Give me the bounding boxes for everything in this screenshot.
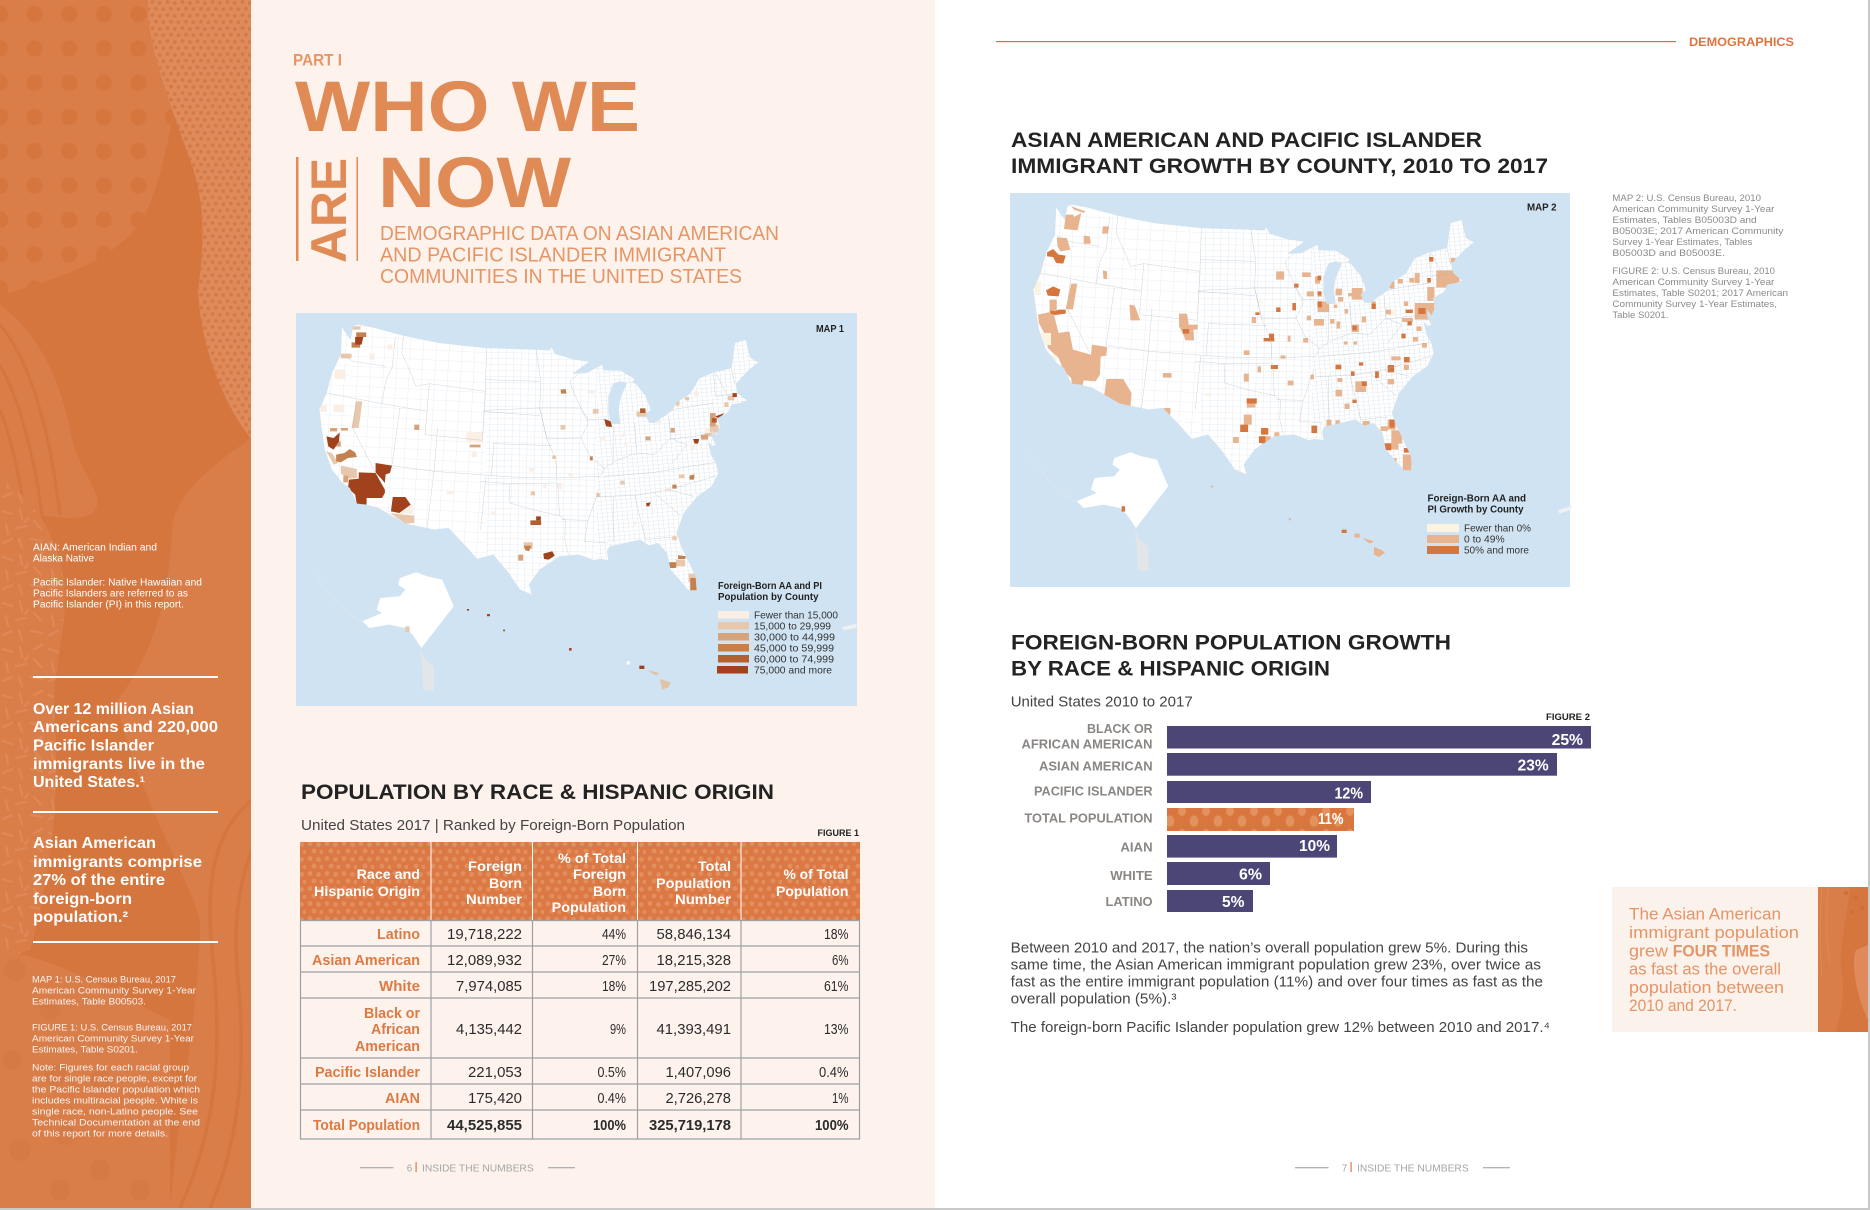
map 2 legend: PI Growth by County (1428, 504, 1524, 516)
subtitle: AND PACIFIC ISLANDER IMMIGRANT (380, 244, 726, 266)
row: Black or African American: American (355, 1039, 420, 1055)
row: Latino: 44% (602, 927, 626, 943)
heading: figure 2: BY RACE & HISPANIC ORIGIN (1011, 658, 1330, 680)
bar: Black or African American 25% (1022, 721, 1591, 752)
source notes: map 2 and figure 2: Community Survey 1-Year Estimates, (1612, 299, 1777, 310)
source notes: map 2 and figure 2: MAP 2: U.S. Census Bureau, 2010 (1612, 193, 1761, 204)
source notes (32, 974, 200, 1140)
row: Asian American (312, 953, 849, 969)
footer: page 7 (1295, 1162, 1510, 1174)
row: AIAN (385, 1091, 849, 1107)
footer: page 7: 7 (1342, 1162, 1347, 1174)
map 1 legend (717, 581, 838, 676)
table header: Born (489, 875, 522, 891)
title: ARE (301, 158, 357, 263)
row: Black or African American: 4,135,442 (456, 1022, 522, 1038)
table header: Foreign (573, 866, 626, 882)
map 2 legend: Fewer than 0% (1464, 522, 1531, 534)
source notes: Estimates, Table S0201. (32, 1044, 138, 1056)
stat: 27 percent (33, 835, 202, 926)
bar: Pacific Islander 12%: PACIFIC ISLANDER (1034, 784, 1153, 798)
table header: Hispanic Origin (314, 883, 420, 899)
source notes: American Community Survey 1-Year (32, 986, 196, 996)
glossary note: Pacific Islander: Native Hawaiian and (33, 578, 202, 588)
row: AIAN: 2,726,278 (666, 1091, 731, 1107)
row: Total Population: 44,525,855 (447, 1118, 522, 1134)
row: Pacific Islander: 1,407,096 (666, 1065, 731, 1081)
map 1 legend: Foreign-Born AA and PI (718, 581, 822, 592)
row: Latino (377, 927, 849, 943)
row: Asian American: 18,215,328 (656, 953, 731, 969)
stat: 27 percent: foreign-born (33, 891, 132, 908)
page background: left page (0, 0, 935, 1208)
callout: four times: as fast as the overall (1629, 960, 1781, 979)
row: AIAN: 175,420 (468, 1091, 522, 1107)
stat: 12 million: United States.¹ (33, 774, 145, 791)
row: Black or African American: 13% (824, 1022, 849, 1038)
table header: Population (776, 883, 848, 899)
callout: four times: population between (1629, 978, 1784, 997)
row: AIAN: AIAN (385, 1091, 420, 1107)
source notes: map 2 and figure 2: American Community Survey 1-Year (1612, 204, 1774, 215)
title: NOW (378, 144, 571, 223)
map 1 legend: Population by County (718, 592, 819, 603)
table header: Foreign (468, 858, 522, 874)
map 1 legend: 45,000 to 59,999 (754, 642, 834, 654)
part label: PART I (293, 50, 342, 70)
stat: 12 million (33, 701, 218, 791)
stat: 27 percent: population.² (33, 909, 128, 926)
map 1 legend: 75,000 and more (754, 664, 832, 676)
divider (33, 676, 218, 678)
subtitle: COMMUNITIES IN THE UNITED STATES (380, 265, 742, 288)
bar: Latino 5%: LATINO (1106, 894, 1153, 909)
table header: Population (656, 875, 731, 891)
table header: Race and (357, 866, 420, 882)
source notes: map 2 and figure 2: B05003D and B05003E. (1612, 248, 1725, 259)
map 1 legend: 30,000 to 44,999 (754, 632, 835, 644)
body text: The foreign-born Pacific Islander population grew 12% between 2010 and 2017.⁴ (1011, 1020, 1550, 1036)
heading: population table: POPULATION BY RACE & HISPANIC ORIGIN (301, 781, 774, 804)
bar: Total Population 11%: 11% (1318, 811, 1344, 828)
row: Pacific Islander: 0.4% (819, 1065, 849, 1081)
source notes: of this report for more details. (32, 1128, 168, 1140)
panel: orange sidebar (0, 0, 252, 1208)
stat: 27 percent: Asian American (33, 835, 156, 852)
row: Black or African American: 41,393,491 (656, 1022, 731, 1038)
body text (1011, 940, 1550, 1036)
row: Total Population (313, 1118, 849, 1134)
row: Black or African American: African (371, 1022, 420, 1038)
callout: four times: grew (1629, 941, 1669, 960)
source notes: map 2 and figure 2: B05003E; 2017 American Community (1612, 226, 1784, 237)
map 1 label: MAP 1 (816, 323, 844, 335)
bar: Black or African American 25%: AFRICAN AMERICAN (1022, 736, 1152, 752)
figure 1 label: FIGURE 1 (818, 828, 860, 839)
row: Black or African American (355, 1006, 849, 1055)
figure 2 subtitle: United States 2010 to 2017 (1011, 694, 1193, 710)
row: Asian American: 12,089,932 (447, 953, 522, 969)
source notes: the Pacific Islander population which (32, 1084, 200, 1096)
row: White: 197,285,202 (649, 979, 731, 995)
title (295, 68, 640, 263)
row: Total Population: 100% (815, 1118, 849, 1134)
row: White: 7,974,085 (456, 979, 522, 995)
glossary note: Pacific Islanders are referred to as (33, 588, 188, 600)
source notes: MAP 1: U.S. Census Bureau, 2017 (32, 974, 176, 986)
footer: page 7: INSIDE THE NUMBERS (1357, 1162, 1469, 1174)
running header: demographics: DEMOGRAPHICS (1689, 35, 1794, 49)
source notes: Note: Figures for each racial group (32, 1062, 189, 1074)
stat: 12 million: Pacific Islander (33, 738, 154, 754)
subtitle: DEMOGRAPHIC DATA ON ASIAN AMERICAN (380, 222, 779, 245)
bar: White 6%: WHITE (1110, 868, 1153, 883)
footer: page 6: 6 (407, 1162, 412, 1174)
table header: Total (698, 858, 731, 874)
table header: Number (675, 891, 732, 907)
stat: 27 percent: immigrants comprise (33, 854, 202, 871)
row: Latino: 58,846,134 (656, 927, 731, 943)
bar: Total Population 11% (1024, 808, 1354, 831)
stat: 12 million: Over 12 million Asian (33, 701, 194, 718)
figure 2 label: FIGURE 2 (1546, 712, 1590, 723)
map 2 label: MAP 2 (1527, 202, 1557, 214)
source notes: map 2 and figure 2 (1612, 193, 1788, 321)
divider (33, 811, 218, 813)
bar: Asian American 23% (1039, 753, 1557, 776)
footer: page 6: INSIDE THE NUMBERS (422, 1162, 534, 1174)
heading: map 2: IMMIGRANT GROWTH BY COUNTY, 2010 TO 2017 (1011, 155, 1548, 178)
bar chart: population growth (1022, 721, 1591, 912)
table subtitle: United States 2017 | Ranked by Foreign-Born Population (301, 817, 685, 834)
map 2 legend: 50% and more (1464, 544, 1529, 556)
divider (33, 941, 218, 943)
heading: figure 2: FOREIGN-BORN POPULATION GROWTH (1011, 632, 1451, 654)
map 2: immigrant growth by county (1010, 193, 1572, 587)
footer: page 6 (360, 1162, 575, 1174)
source notes: FIGURE 1: U.S. Census Bureau, 2017 (32, 1022, 192, 1034)
row: Latino: Latino (377, 927, 420, 943)
row: White (379, 979, 849, 995)
map 1 legend: 15,000 to 29,999 (754, 620, 831, 632)
bar: Black or African American 25%: 25% (1552, 732, 1583, 749)
callout: four times: The Asian American (1629, 904, 1781, 924)
row: White: 61% (824, 979, 849, 995)
body text: Between 2010 and 2017, the nation’s overall population grew 5%. During this (1011, 940, 1528, 956)
source notes: map 2 and figure 2: Estimates, Tables B05003D and (1612, 215, 1757, 226)
source notes: single race, non-Latino people. See (32, 1106, 198, 1118)
row: Total Population: 325,719,178 (649, 1118, 731, 1134)
table header: Population (552, 899, 626, 915)
source notes: map 2 and figure 2: Table S0201. (1612, 310, 1668, 321)
bar: AIAN 10% (1120, 835, 1337, 858)
bar: Latino 5%: 5% (1222, 894, 1244, 911)
bar: Latino 5% (1106, 890, 1253, 912)
bar: Pacific Islander 12%: 12% (1334, 786, 1363, 802)
glossary note: AIAN: American Indian and (33, 542, 157, 554)
subtitle (380, 222, 779, 288)
row: AIAN: 1% (832, 1091, 849, 1107)
heading: map 2 (1011, 129, 1548, 178)
source notes: Estimates, Table B00503. (32, 996, 146, 1008)
glossary note: Alaska Native (33, 554, 94, 564)
bar: Total Population 11%: TOTAL POPULATION (1024, 810, 1153, 826)
stat: 12 million: immigrants live in the (33, 756, 205, 773)
row: Asian American: Asian American (312, 953, 420, 969)
row: Asian American: 27% (602, 953, 626, 969)
map 1: foreign-born population by county (296, 313, 857, 706)
row: White: 18% (602, 979, 626, 995)
callout: four times: 2010 and 2017. (1629, 996, 1737, 1015)
row: Latino: 19,718,222 (447, 927, 522, 943)
glossary note (33, 542, 202, 610)
bar: Asian American 23%: 23% (1518, 758, 1549, 774)
row: Black or African American: 9% (610, 1022, 626, 1038)
row: Pacific Islander: 221,053 (468, 1065, 522, 1081)
source notes: includes multiracial people. White is (32, 1096, 198, 1106)
callout: four times: FOUR TIMES (1673, 941, 1770, 960)
source notes: map 2 and figure 2: Survey 1-Year Estimates, Tables (1612, 237, 1753, 248)
row: Asian American: 6% (832, 953, 849, 969)
row: Pacific Islander (315, 1065, 849, 1081)
bar: AIAN 10%: AIAN (1120, 840, 1153, 854)
page background: right page (935, 0, 1868, 1208)
bar: White 6%: 6% (1239, 866, 1262, 884)
row: Latino: 18% (824, 927, 849, 943)
row: Pacific Islander: 0.5% (598, 1065, 626, 1081)
map 2 legend (1427, 494, 1531, 556)
callout: four times: immigrant population (1629, 923, 1799, 942)
map 2 legend: Foreign-Born AA and (1428, 494, 1526, 504)
table header: Born (593, 883, 626, 899)
map 1 legend: Fewer than 15,000 (754, 610, 838, 622)
row: White: White (379, 979, 420, 995)
map 1 legend: 60,000 to 74,999 (754, 654, 834, 666)
source notes: map 2 and figure 2: Estimates, Table S0201; 2017 American (1612, 288, 1788, 299)
body text: same time, the Asian American immigrant population grew 23%, over twice as (1011, 958, 1541, 974)
body text: fast as the entire immigrant population (11%) and over four times as fast as the (1011, 974, 1543, 990)
body text: overall population (5%).³ (1011, 992, 1177, 1008)
table header: Number (466, 891, 523, 907)
glossary note: Pacific Islander (PI) in this report. (33, 600, 184, 610)
stat: 12 million: Americans and 220,000 (33, 719, 218, 736)
bar: White 6% (1110, 862, 1270, 885)
source notes: Technical Documentation at the end (32, 1118, 200, 1128)
row: Pacific Islander: Pacific Islander (315, 1065, 420, 1081)
bar: Black or African American 25%: BLACK OR (1087, 721, 1153, 736)
table header (300, 842, 860, 920)
source notes: American Community Survey 1-Year (32, 1034, 194, 1044)
stat: 27 percent: 27% of the entire (33, 872, 165, 889)
heading: map 2: ASIAN AMERICAN AND PACIFIC ISLANDER (1011, 129, 1482, 152)
row: Total Population: 100% (593, 1118, 626, 1134)
bar: Pacific Islander 12% (1034, 781, 1371, 803)
title: WHO WE (295, 68, 640, 147)
source notes: map 2 and figure 2: FIGURE 2: U.S. Census Bureau, 2010 (1612, 266, 1775, 277)
row: AIAN: 0.4% (598, 1091, 626, 1107)
table header: % of Total (784, 866, 848, 882)
table header: % of Total (558, 850, 626, 866)
row: Total Population: Total Population (313, 1118, 420, 1134)
source notes: are for single race people, except for (32, 1074, 197, 1084)
heading: figure 2 (1011, 632, 1451, 680)
row: Black or African American: Black or (364, 1006, 420, 1022)
callout: four times (1612, 887, 1868, 1032)
callout decorative strip (1818, 887, 1868, 1032)
source notes: map 2 and figure 2: American Community Survey 1-Year (1612, 277, 1774, 288)
map 2 legend: 0 to 49% (1464, 534, 1505, 546)
bar: AIAN 10%: 10% (1299, 838, 1330, 855)
bar: Asian American 23%: ASIAN AMERICAN (1039, 758, 1153, 774)
table: population by race (300, 842, 860, 1139)
